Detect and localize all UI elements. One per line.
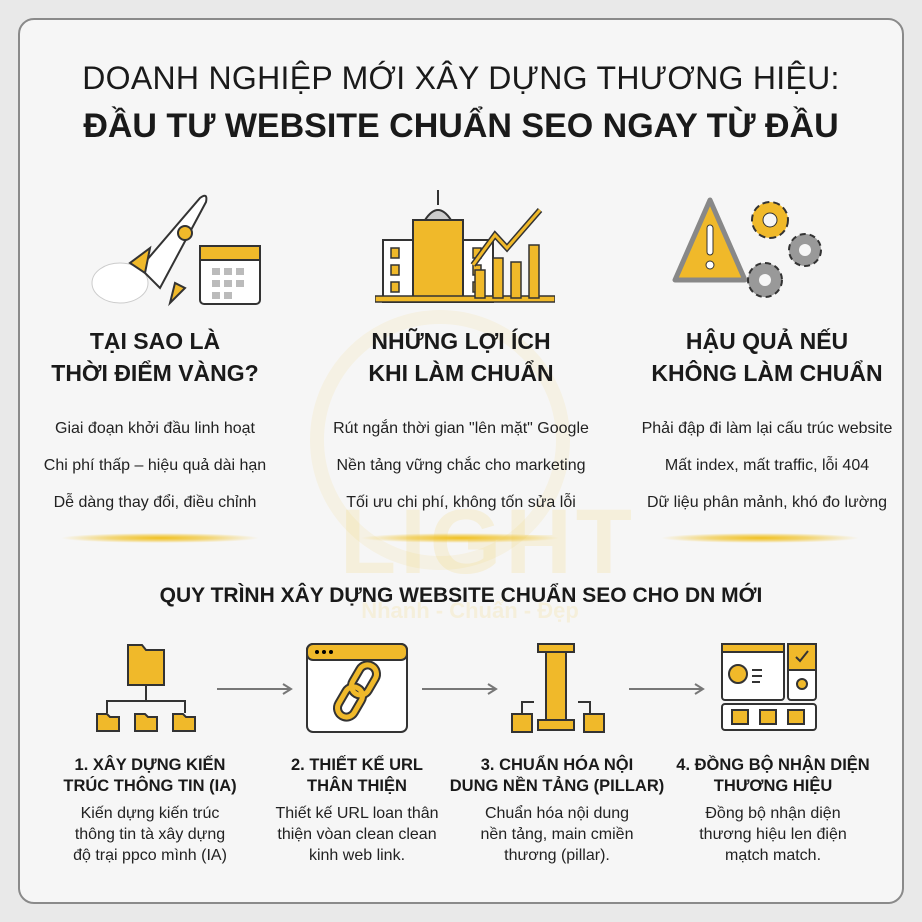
bullets: Giai đoạn khởi đầu linh hoạt [55,420,255,437]
heading: KHÔNG LÀM CHUẨN [651,360,883,386]
arrow [629,683,705,695]
icon: building and chart [375,190,555,303]
heading: KHI LÀM CHUẨN [368,360,554,386]
heading [51,328,259,386]
bullets [333,419,589,511]
panel: why golden time [44,328,266,511]
step 1: TRÚC THÔNG TIN (IA) [63,777,237,795]
step 2: 2. THIẾT KẾ URL [291,756,423,774]
step 2: thiện vòan clean clean [277,826,437,843]
bullets: Dữ liệu phân mảnh, khó đo lường [647,494,887,511]
watermark [310,310,636,623]
step 1: thông tin tà xây dựng [75,826,225,843]
heading: TẠI SAO LÀ [90,328,220,354]
arrow [217,683,293,695]
step 3: 3. CHUẨN HÓA NỘI [481,756,633,774]
bullets [642,420,892,511]
bullets: Tối ưu chi phí, không tốn sửa lỗi [346,494,576,511]
step 2 [275,755,439,864]
step 4: mạtch match. [725,847,821,864]
icon: warning and gears [672,198,822,298]
icon: brand identity [721,643,817,731]
icon: folder hierarchy [96,644,196,732]
step 2: kinh web link. [309,847,405,864]
arrow [422,683,498,695]
bullets: Nền tảng vững chắc cho marketing [336,457,586,474]
bullets: Mất index, mất traffic, lỗi 404 [665,457,869,474]
heading: NHỮNG LỢI ÍCH [371,328,551,354]
heading: THỜI ĐIỂM VÀNG? [51,360,259,386]
section title: QUY TRÌNH XÂY DỰNG WEBSITE CHUẨN SEO CHO DN MỚI [160,584,762,607]
step 1: độ trại ppco mình (IA) [73,847,227,864]
bullets: Phải đập đi làm lại cấu trúc website [642,420,892,437]
title: ĐẦU TƯ WEBSITE CHUẨN SEO NGAY TỪ ĐẦU [83,107,839,145]
step 3: DUNG NỀN TẢNG (PILLAR) [450,777,664,795]
step 4 [676,754,870,864]
step 3: thương (pillar). [504,847,610,864]
step 3: nền tảng, main cmiền [480,826,633,843]
step 2: THÂN THIỆN [307,777,407,795]
heading [368,328,554,386]
step 2: Thiết kế URL loan thân [275,805,439,822]
watermark: Nhanh - Chuẩn - Đẹp [361,598,579,623]
step 1: Kiến dựng kiến trúc [81,805,219,822]
icon: browser link [306,643,408,733]
step 4: THƯƠNG HIỆU [714,777,832,795]
panel: consequences [642,328,892,511]
icon: rocket and calendar [92,194,261,306]
heading [651,328,883,386]
step 4: thương hiệu len điện [699,826,847,843]
step 4: 4. ĐỒNG BỘ NHẬN DIỆN [676,756,870,774]
watermark: LIGHT [340,491,636,593]
title [82,60,840,145]
step 1: 1. XÂY DỰNG KIẾN [75,756,225,774]
icon: pillar [511,643,605,733]
bullets [44,420,266,511]
bullets: Chi phí thấp – hiệu quả dài hạn [44,457,266,474]
panel: benefits [333,328,589,511]
step 3 [450,754,664,864]
bullets: Rút ngắn thời gian "lên mặt" Google [333,420,589,437]
heading: HẬU QUẢ NẾU [686,328,848,354]
bullets: Dễ dàng thay đổi, điều chỉnh [54,494,256,511]
step 3: Chuẩn hóa nội dung [485,805,629,822]
step 1 [63,755,237,864]
title: DOANH NGHIỆP MỚI XÂY DỰNG THƯƠNG HIỆU: [82,60,840,96]
step 4: Đồng bộ nhận diện [705,805,841,822]
